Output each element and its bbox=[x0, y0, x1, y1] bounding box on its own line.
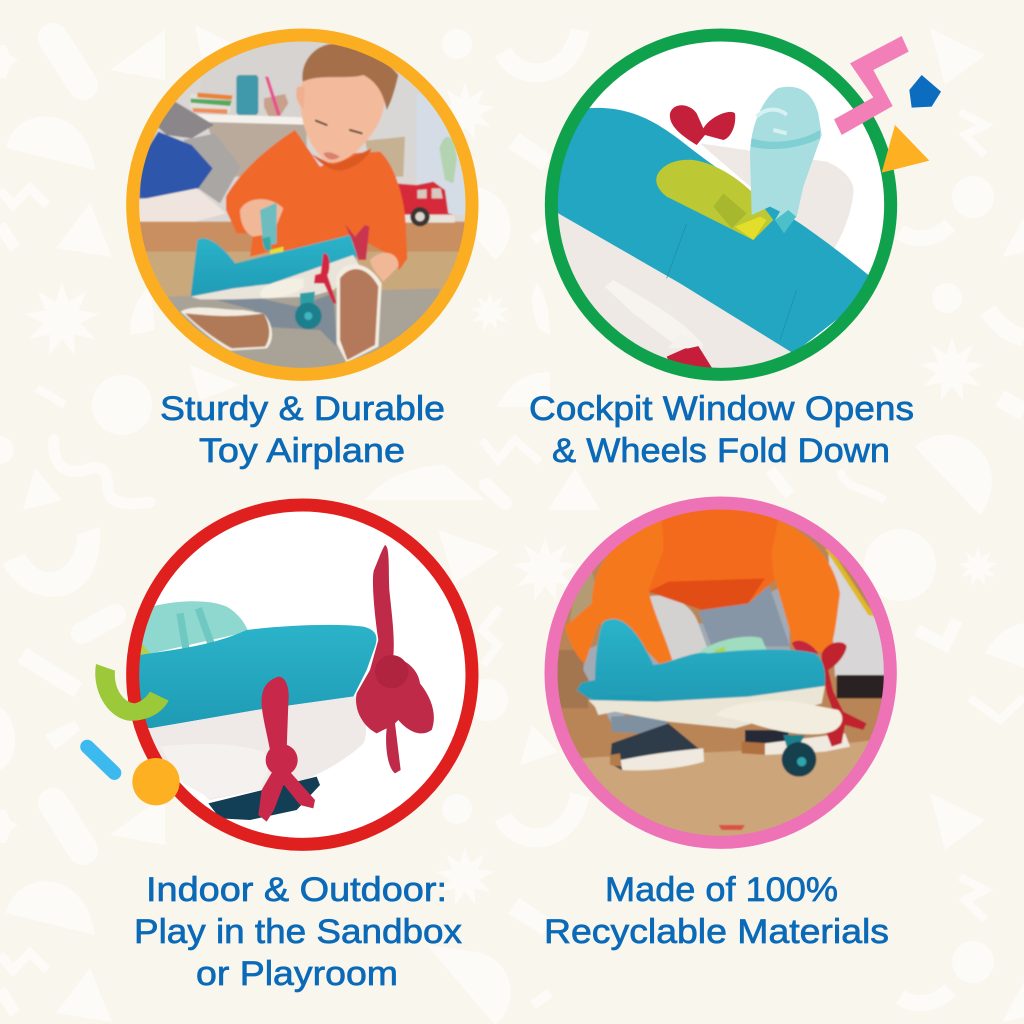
ring: pink bbox=[551, 503, 890, 842]
toy fire truck bbox=[395, 182, 455, 226]
ring: red bbox=[133, 505, 472, 844]
decoration: yellow triangle bbox=[882, 125, 929, 173]
panel: sturdy and durable bbox=[133, 35, 472, 374]
ring: green bbox=[551, 35, 891, 374]
decoration: orange dot bbox=[132, 758, 180, 805]
caption: recyclable materials bbox=[544, 871, 889, 951]
photo: opening cockpit bbox=[553, 87, 868, 373]
toy airplane bbox=[577, 619, 842, 777]
teal fuselage bbox=[553, 108, 868, 353]
photo: propellers closeup bbox=[133, 545, 434, 822]
photo: baby with toy airplane bbox=[137, 37, 470, 373]
caption: indoor and outdoor: or Playroom bbox=[196, 955, 398, 993]
sneakers bbox=[181, 264, 382, 363]
panel: cockpit window bbox=[551, 35, 941, 374]
caption: cockpit window: Cockpit Window Opens bbox=[529, 390, 914, 428]
decoration: blue pentagon bbox=[909, 75, 941, 108]
toddler bbox=[217, 43, 407, 347]
panel: indoor and outdoor bbox=[77, 505, 472, 844]
caption: recyclable materials: Made of 100% bbox=[605, 871, 838, 909]
ring: yellow bbox=[133, 35, 472, 374]
toy airplane bbox=[191, 203, 369, 329]
decoration: pink zigzag bbox=[834, 36, 909, 135]
caption: recyclable materials: Recyclable Materials bbox=[544, 913, 889, 951]
decoration: green arc bbox=[95, 664, 169, 721]
cockpit opening bbox=[656, 160, 773, 240]
caption: cockpit window: & Wheels Fold Down bbox=[552, 432, 890, 470]
caption: sturdy and durable: Toy Airplane bbox=[199, 432, 405, 470]
canopy bbox=[750, 87, 822, 230]
caption: sturdy and durable bbox=[160, 390, 445, 470]
panel: recyclable materials bbox=[551, 503, 890, 842]
caption: indoor and outdoor bbox=[134, 871, 462, 993]
decoration: blue pill bbox=[77, 737, 124, 783]
caption: sturdy and durable: Sturdy & Durable bbox=[160, 390, 445, 428]
large propeller bbox=[356, 545, 434, 773]
small propeller bbox=[258, 677, 315, 822]
red propeller bbox=[670, 105, 735, 145]
caption: indoor and outdoor: Play in the Sandbox bbox=[134, 913, 462, 951]
photo: toddler crouching with airplane bbox=[552, 503, 890, 842]
caption: cockpit window bbox=[529, 390, 914, 470]
caption: indoor and outdoor: Indoor & Outdoor: bbox=[146, 871, 447, 909]
